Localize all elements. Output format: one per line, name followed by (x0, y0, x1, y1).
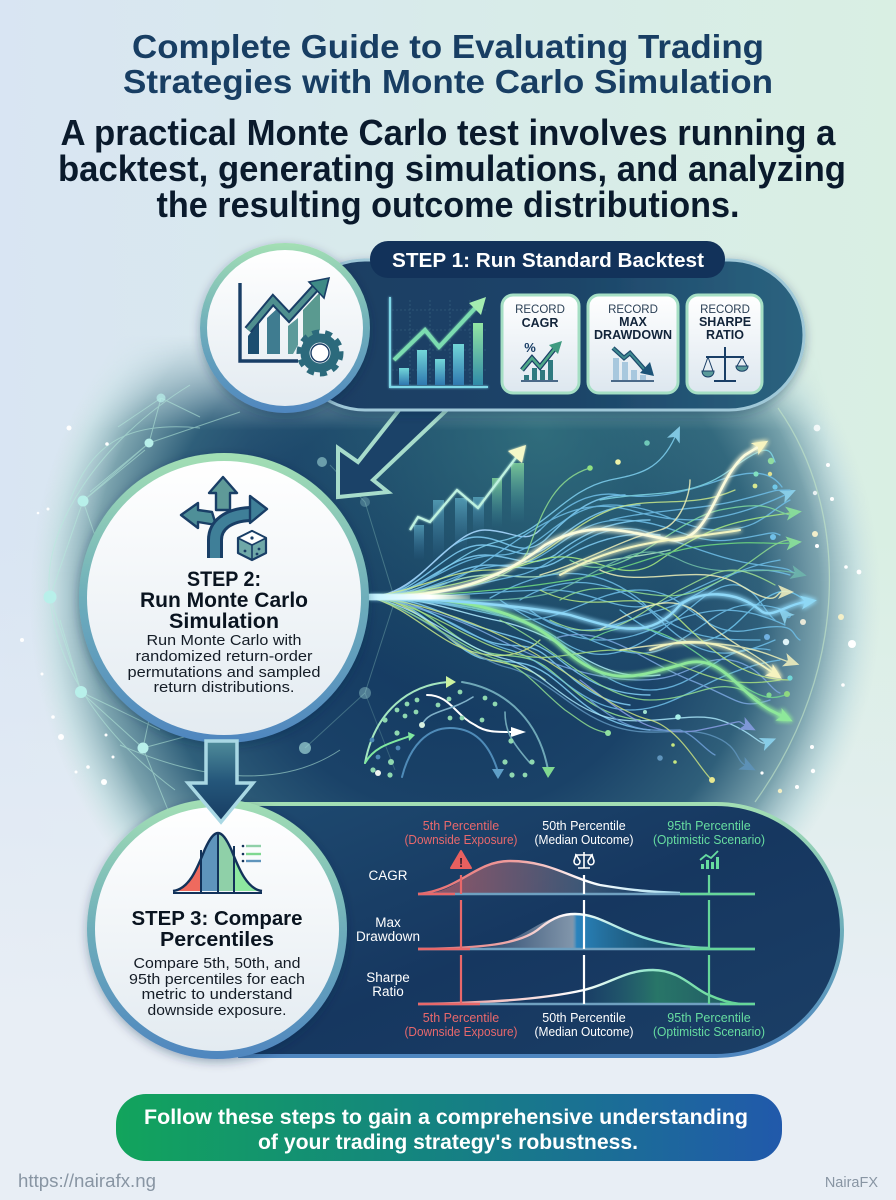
step 1 panel body (290, 260, 804, 410)
step 1 arrow (338, 405, 452, 497)
card: sharpe ratio: SHARPE (699, 315, 751, 329)
step 2 heading (140, 568, 308, 633)
monte carlo fan of paths (368, 437, 808, 783)
card: max drawdown (588, 295, 678, 393)
cream strands (540, 480, 793, 672)
mini growth chart behind paths (410, 445, 526, 560)
distribution: max drawdown (418, 914, 755, 949)
card: sharpe ratio: RATIO (706, 328, 744, 342)
step 1 heading pill: STEP 1: Run Standard Backtest (392, 249, 704, 272)
thin green strands (370, 468, 795, 780)
card: max drawdown: DRAWDOWN (594, 328, 672, 342)
card: sharpe ratio: RECORD (700, 304, 750, 316)
step 2 description: randomized return-order (136, 648, 312, 665)
panel: step 3 percentiles (240, 804, 842, 1056)
step 3 disc (87, 799, 347, 1059)
icon: balance scale (574, 852, 594, 868)
icon: warning: ! (459, 855, 463, 870)
row labels: Max (375, 915, 401, 930)
step 3 heading: Percentiles (160, 928, 274, 951)
top percentile labels (404, 819, 765, 847)
card: CAGR (502, 295, 579, 393)
row labels: Sharpe (366, 970, 410, 985)
top percentile labels: (Optimistic Scenario) (653, 833, 765, 847)
step 3 panel body (240, 804, 842, 1056)
footer callout (116, 1094, 782, 1161)
title: Complete Guide to Evaluating Trading (132, 28, 764, 65)
step 2 description: Run Monte Carlo with (146, 632, 302, 649)
card: sharpe ratio (687, 295, 762, 393)
subtitle (58, 112, 846, 225)
icon: mini growth chart (700, 851, 719, 869)
sparkle dots (20, 425, 861, 793)
bulb strands near origin (370, 495, 670, 730)
brand credit: NairaFX (825, 1175, 878, 1191)
card: CAGR: % (524, 340, 536, 355)
step 3 description: Compare 5th, 50th, and (134, 956, 300, 972)
neck of light (368, 594, 470, 600)
step 3 description: downside exposure. (148, 1003, 286, 1019)
step 3 description: metric to understand (142, 987, 292, 1003)
step 2 description: permutations and sampled (128, 664, 320, 681)
bright glowing strands (370, 447, 805, 716)
background (0, 0, 896, 844)
step 2 heading: STEP 2: (187, 568, 261, 591)
icon: warning (451, 851, 471, 870)
icon: diverging arrows and die (181, 477, 267, 560)
step 1 icon circle (200, 243, 370, 413)
bottom percentile labels: 50th Percentile (542, 1011, 626, 1025)
network nodes (44, 394, 371, 754)
bottom percentile labels: (Optimistic Scenario) (653, 1025, 765, 1039)
bottom percentile labels: 5th Percentile (423, 1011, 499, 1025)
footer callout: of your trading strategy's robustness. (258, 1131, 638, 1154)
bottom percentile labels: 95th Percentile (667, 1011, 751, 1025)
card: max drawdown: RECORD (608, 304, 658, 316)
card: CAGR: RECORD (515, 304, 565, 316)
top percentile labels: 50th Percentile (542, 819, 626, 833)
step 3 heading (132, 907, 302, 951)
icon: chart with gear (240, 278, 341, 374)
card: CAGR: CAGR (522, 316, 558, 330)
step 3 circle (87, 799, 347, 1059)
title: Strategies with Monte Carlo Simulation (123, 63, 773, 100)
step 2 circle (79, 453, 369, 743)
distribution: CAGR (418, 861, 755, 894)
step 3 description: 95th percentiles for each (129, 972, 305, 988)
panel: step 1 (200, 241, 804, 413)
step 1 heading pill (370, 241, 725, 278)
top percentile labels: 5th Percentile (423, 819, 499, 833)
backtest chart (390, 297, 488, 387)
subtitle: A practical Monte Carlo test involves running a (60, 112, 836, 153)
row labels: CAGR (368, 868, 408, 883)
top percentile labels: 95th Percentile (667, 819, 751, 833)
top percentile labels: (Median Outcome) (534, 833, 634, 847)
outer arc and right-side network (305, 408, 829, 802)
footer callout: Follow these steps to gain a comprehensive understanding (144, 1106, 748, 1129)
subtitle: backtest, generating simulations, and analyzing (58, 148, 846, 189)
step 2 description: return distributions. (154, 679, 294, 696)
row labels: Ratio (372, 984, 404, 999)
bottom percentile labels: (Downside Exposure) (404, 1025, 518, 1039)
arrow: step 2 to step 3 (188, 741, 253, 822)
row labels: Drawdown (356, 929, 420, 944)
bottom percentile labels: (Median Outcome) (534, 1025, 634, 1039)
end dots (587, 440, 793, 783)
icon: bell curve (170, 830, 264, 894)
percentile markers (461, 875, 709, 1004)
step 2 heading: Run Monte Carlo (140, 589, 308, 612)
thin blue strands (370, 437, 808, 765)
step 3 heading: STEP 3: Compare (132, 907, 302, 930)
row labels (356, 868, 420, 999)
distribution: sharpe ratio (418, 970, 755, 1004)
subtitle: the resulting outcome distributions. (156, 184, 740, 225)
card: max drawdown: MAX (619, 315, 648, 329)
step 2 heading: Simulation (169, 610, 279, 633)
small random-path arc diagram (365, 676, 555, 779)
step 3 description (129, 956, 305, 1019)
website credit: https://nairafx.ng (18, 1171, 156, 1191)
step 2 description (128, 632, 320, 696)
bottom percentile labels (404, 1011, 765, 1039)
network decoration (49, 385, 340, 810)
title (123, 28, 773, 100)
step 2 disc (79, 453, 369, 743)
top percentile labels: (Downside Exposure) (404, 833, 518, 847)
